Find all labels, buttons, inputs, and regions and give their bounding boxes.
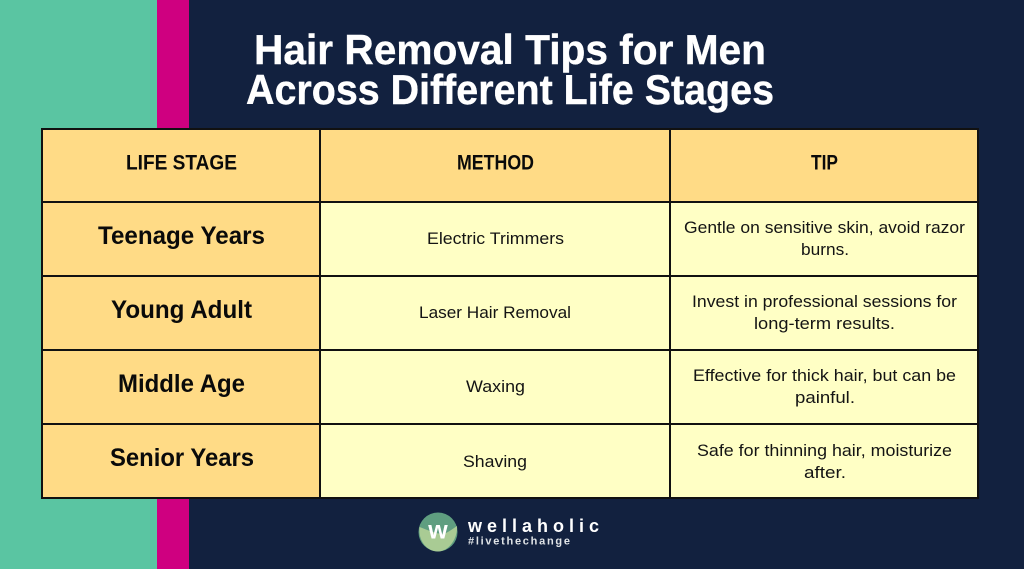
row: young adult: long-term results. [754,315,895,333]
icon: logo circle: w [427,516,448,544]
magenta band [157,0,189,569]
row: teenage years: burns. [801,241,849,259]
left teal band [0,0,157,569]
row: middle age: Waxing [466,378,525,396]
icon: logo circle [418,512,458,552]
title [246,26,774,113]
row: middle age [118,367,956,407]
life stage column background [42,202,320,498]
title: Across Different Life Stages [246,66,774,113]
row: young adult: Laser Hair Removal [419,304,571,322]
brand name: wellaholic [467,516,599,536]
row: teenage years: Electric Trimmers [427,230,564,248]
logo: wellaholic [418,512,599,552]
row: young adult [111,293,958,333]
row: senior years [110,442,952,482]
header: method: METHOD [457,152,534,174]
header: tip: TIP [811,152,838,174]
row: middle age: Effective for thick hair, but can be [693,367,956,385]
table [42,129,978,498]
header: life stage: LIFE STAGE [126,152,237,174]
row: middle age: Middle Age [118,370,245,398]
body cells background [320,202,978,498]
row: teenage years: Gentle on sensitive skin, avoid razor [684,219,966,237]
row: teenage years [98,219,966,259]
row: senior years: Safe for thinning hair, moisturize [697,442,952,460]
row: middle age: painful. [795,389,855,407]
hashtag: #livethechange [468,536,570,548]
header row background [42,129,978,202]
row: senior years: Senior Years [110,444,254,472]
row: senior years: Shaving [463,453,527,471]
title: Hair Removal Tips for Men [254,26,766,73]
row: senior years: after. [804,464,846,482]
row: teenage years: Teenage Years [98,222,265,250]
row: young adult: Young Adult [111,296,253,324]
row: young adult: Invest in professional sessions for [692,293,958,311]
